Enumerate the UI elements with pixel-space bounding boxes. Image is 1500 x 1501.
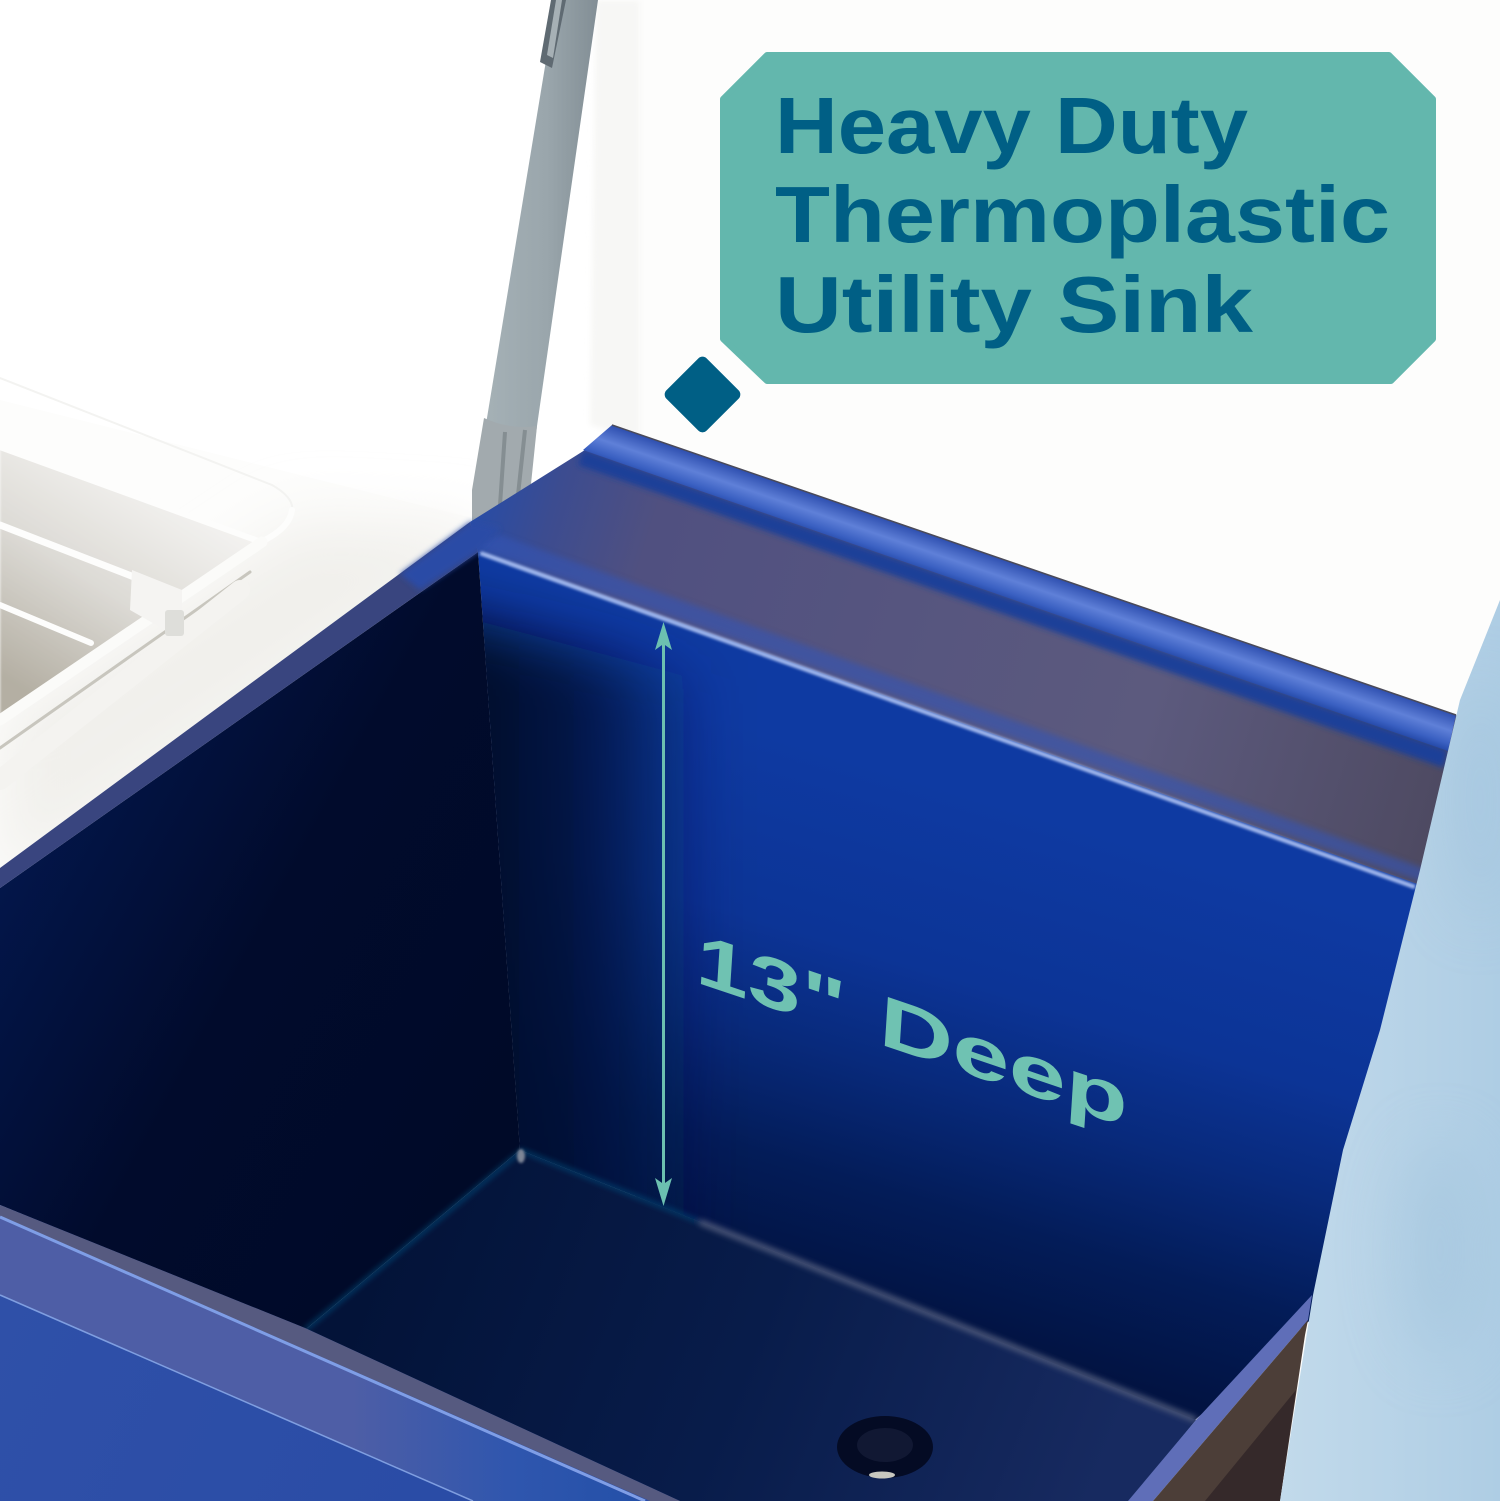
- back deck: [470, 427, 1470, 890]
- callout heading text: Utility Sink: [775, 260, 1254, 349]
- mop pole: [472, 0, 598, 522]
- floor edge glow: [305, 1150, 1196, 1420]
- depth label: Deep: [877, 981, 1130, 1143]
- rear lip: [583, 425, 1456, 751]
- drain: [837, 1416, 933, 1478]
- arrow: depth dimension: [655, 622, 672, 1206]
- right rim: [1128, 1295, 1312, 1501]
- callout pointer: diamond: [662, 354, 743, 435]
- depth label: 13": [694, 919, 848, 1048]
- top edge highlight: [480, 553, 1415, 887]
- denim towel: [1280, 600, 1500, 1501]
- front rim: [0, 1205, 680, 1501]
- left rim edge: [0, 522, 478, 888]
- left interior wall: [0, 552, 520, 1330]
- drying rack: [0, 378, 292, 780]
- callout heading text: [775, 81, 1390, 349]
- sink: [0, 425, 1470, 1501]
- pole collar: [472, 418, 537, 522]
- callout heading text: Thermoplastic: [775, 170, 1390, 259]
- depth label: [694, 919, 1130, 1143]
- callout: product title: [723, 55, 1433, 381]
- callout heading text: Heavy Duty: [775, 81, 1249, 170]
- back interior wall: [478, 552, 1440, 1420]
- sink floor: [305, 1150, 1196, 1501]
